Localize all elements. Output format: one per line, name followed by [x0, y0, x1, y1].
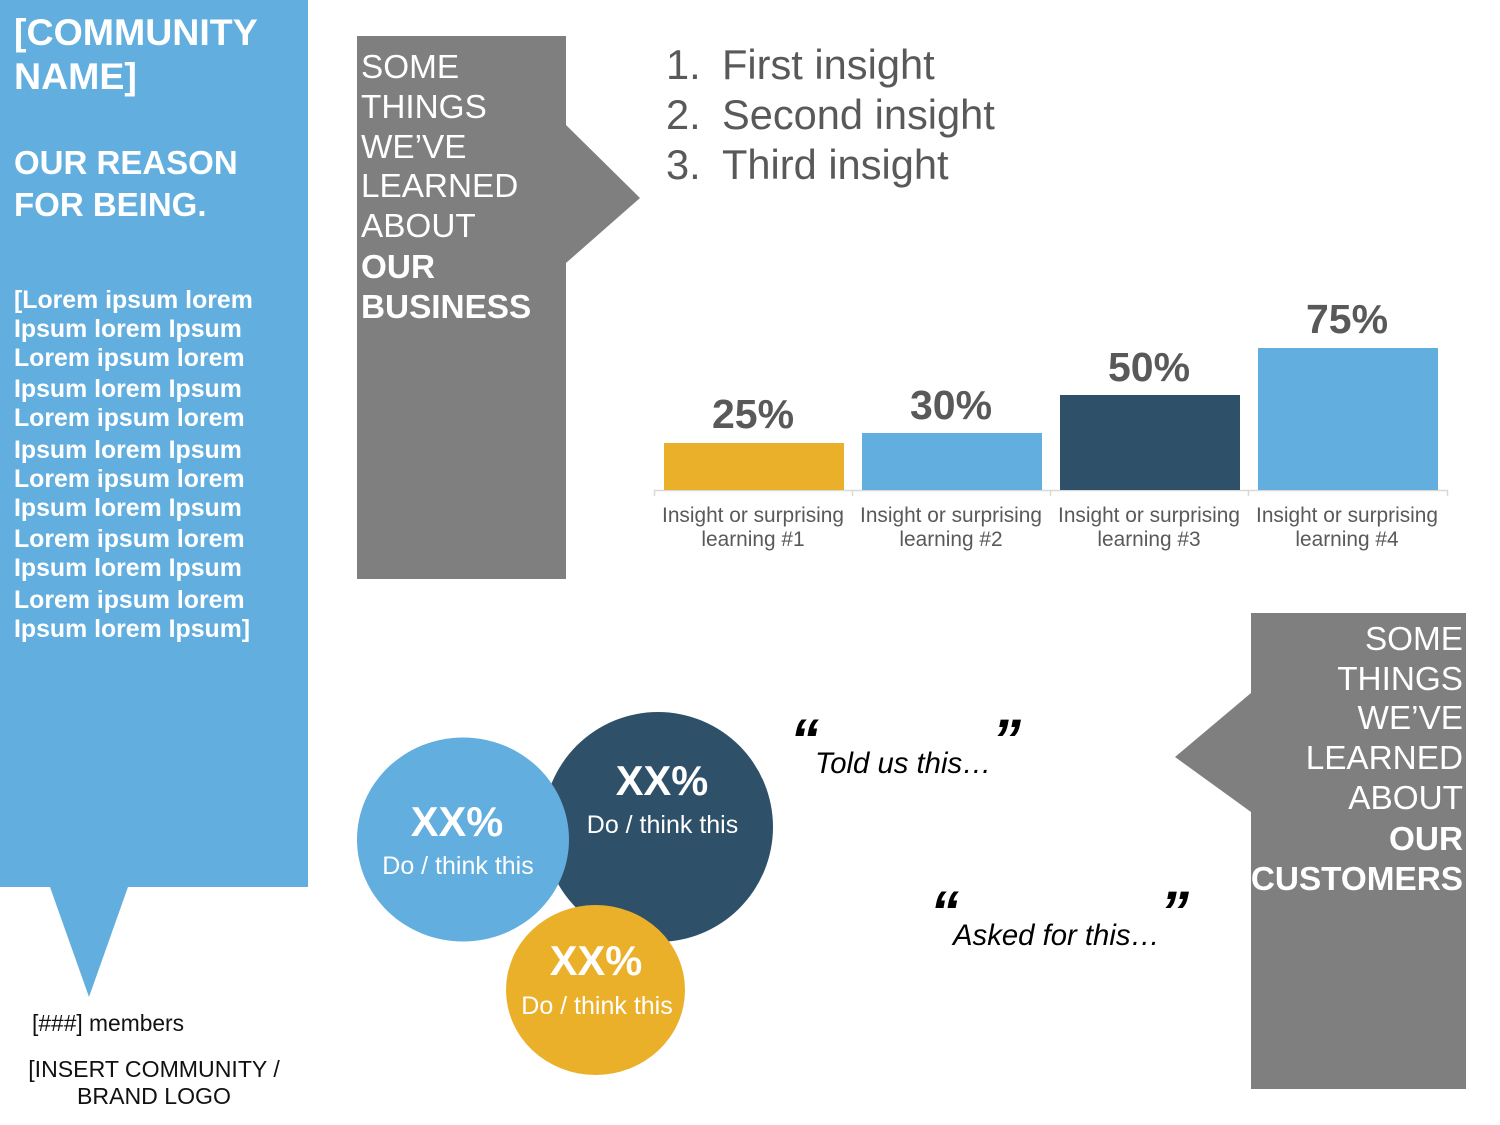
lorem ipsum text block: Ipsum lorem Ipsum — [14, 316, 242, 343]
business panel text — [361, 49, 531, 326]
bar 75%: 75% — [1306, 296, 1388, 342]
bar 25%: 25% — [712, 391, 794, 437]
customers panel text — [1251, 621, 1463, 898]
category labels: learning #4 — [1295, 528, 1399, 551]
quote: told us this: ” — [992, 708, 1021, 773]
lorem ipsum text block: Ipsum lorem Ipsum — [14, 437, 242, 464]
category labels: learning #3 — [1097, 528, 1201, 551]
lorem ipsum text block — [14, 287, 253, 643]
logo placeholder: [INSERT COMMUNITY / — [28, 1056, 280, 1082]
lorem ipsum text block: Ipsum lorem Ipsum — [14, 495, 242, 522]
panel: learned about our business — [357, 36, 640, 579]
reason for being subheading: OUR REASON — [14, 144, 238, 181]
blue circle: Do / think this — [382, 852, 534, 880]
yellow circle — [506, 905, 685, 1075]
bar 75% — [1258, 296, 1438, 490]
community name heading: [COMMUNITY — [14, 11, 258, 53]
quote: told us this: Told us this… — [815, 747, 991, 780]
logo placeholder — [28, 1056, 280, 1109]
community name heading: NAME] — [14, 55, 137, 97]
dark circle: Do / think this — [587, 811, 738, 839]
bar 50% — [1060, 344, 1240, 490]
blue circle: XX% — [411, 798, 503, 845]
overlapping circles — [357, 712, 773, 1075]
category labels: Insight or surprising — [860, 504, 1042, 527]
insights numbered list: 3. — [666, 141, 701, 188]
gray arrow box — [1175, 613, 1466, 1089]
customers panel text: WE’VE — [1358, 700, 1463, 737]
reason for being subheading — [14, 144, 238, 223]
customers panel text: LEARNED — [1306, 740, 1463, 777]
quote: asked for this: Asked for this… — [951, 919, 1160, 952]
quote: asked for this: ” — [1160, 880, 1189, 945]
insights numbered list: First insight — [722, 41, 935, 88]
category labels: Insight or surprising — [1058, 504, 1240, 527]
insights numbered list: Third insight — [722, 141, 949, 188]
business panel text: THINGS — [361, 89, 487, 126]
yellow circle: Do / think this — [521, 992, 673, 1020]
bar 30%: 30% — [910, 382, 992, 428]
bar 30% — [862, 382, 1042, 490]
business panel text: ABOUT — [361, 208, 476, 245]
category labels: Insight or surprising — [662, 504, 844, 527]
category labels: learning #1 — [701, 528, 805, 551]
bar 25% — [664, 391, 844, 490]
insights numbered list: Second insight — [722, 91, 995, 138]
category labels: learning #2 — [899, 528, 1003, 551]
lorem ipsum text block: [Lorem ipsum lorem — [14, 287, 253, 314]
business panel text: LEARNED — [361, 168, 518, 205]
quote: asked for this: “ — [930, 880, 959, 945]
quote: told us this — [790, 708, 1021, 780]
logo placeholder: BRAND LOGO — [77, 1083, 231, 1109]
lorem ipsum text block: Lorem ipsum lorem — [14, 345, 245, 372]
sidebar callout shape — [0, 0, 308, 997]
reason for being subheading: FOR BEING. — [14, 186, 207, 223]
customers panel text: ABOUT — [1348, 780, 1463, 817]
business panel text: OUR — [361, 249, 435, 286]
quote: asked for this — [930, 880, 1189, 952]
lorem ipsum text block: Ipsum lorem Ipsum — [14, 376, 242, 403]
category labels — [662, 504, 1438, 551]
members count: [###] members — [32, 1010, 184, 1036]
gray arrow box — [357, 36, 640, 579]
quote: told us this: “ — [790, 708, 819, 773]
business panel text: BUSINESS — [361, 289, 531, 326]
insights numbered list — [666, 41, 995, 188]
lorem ipsum text block: Lorem ipsum lorem — [14, 405, 245, 432]
business panel text: WE’VE — [361, 129, 466, 166]
lorem ipsum text block: Lorem ipsum lorem — [14, 587, 245, 614]
panel: learned about our customers — [1175, 613, 1466, 1089]
customers panel text: THINGS — [1337, 661, 1463, 698]
lorem ipsum text block: Lorem ipsum lorem — [14, 466, 245, 493]
lorem ipsum text block: Ipsum lorem Ipsum — [14, 555, 242, 582]
customers panel text: OUR — [1389, 821, 1463, 858]
insights numbered list: 1. — [666, 41, 701, 88]
blue circle — [357, 738, 569, 942]
panel: community sidebar — [0, 0, 308, 997]
bar chart — [654, 296, 1448, 551]
dark circle: XX% — [616, 757, 708, 804]
customers panel text: SOME — [1365, 621, 1463, 658]
insights numbered list: 2. — [666, 91, 701, 138]
yellow circle: XX% — [550, 937, 642, 984]
business panel text: SOME — [361, 49, 459, 86]
community name heading — [14, 11, 258, 97]
customers panel text: CUSTOMERS — [1251, 861, 1463, 898]
category labels: Insight or surprising — [1256, 504, 1438, 527]
bar 50%: 50% — [1108, 344, 1190, 390]
dark circle — [543, 712, 773, 942]
lorem ipsum text block: Lorem ipsum lorem — [14, 526, 245, 553]
lorem ipsum text block: Ipsum lorem Ipsum] — [14, 616, 250, 643]
